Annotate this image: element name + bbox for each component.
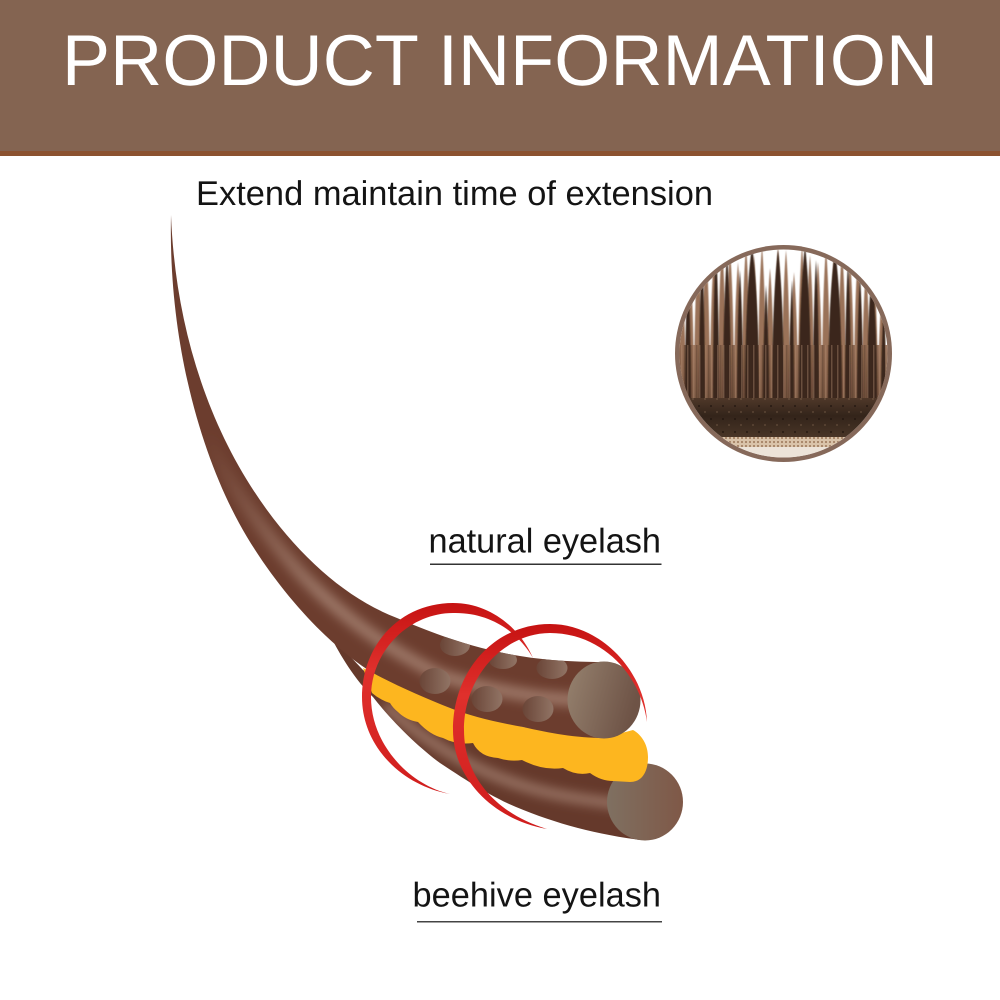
- title: PRODUCT INFORMATION: [62, 21, 938, 101]
- natural eyelash strand: [171, 215, 641, 738]
- beehive eyelash strand: [330, 635, 683, 840]
- label: natural eyelash: natural eyelash: [428, 522, 661, 560]
- lower strand backing: [680, 345, 888, 398]
- heading: extend maintain time: Extend maintain time of extension: [196, 175, 713, 213]
- glue layer: [363, 668, 648, 782]
- red ring front: [453, 624, 647, 829]
- header banner: [0, 0, 1000, 156]
- tray edge: [722, 437, 846, 458]
- label: beehive eyelash: beehive eyelash: [412, 876, 661, 914]
- natural end cap: [568, 662, 640, 738]
- lash bumps: [420, 634, 568, 722]
- strand texture: [675, 345, 892, 400]
- tan strands: [678, 246, 886, 410]
- dark base band: [690, 398, 878, 438]
- beehive end cap: [607, 764, 683, 840]
- product swatch: lash tray circle: [675, 245, 892, 462]
- red ring back: [362, 603, 533, 794]
- lash diagram: [171, 215, 683, 840]
- tinted lower band: [675, 345, 892, 400]
- dark strands: [685, 246, 886, 410]
